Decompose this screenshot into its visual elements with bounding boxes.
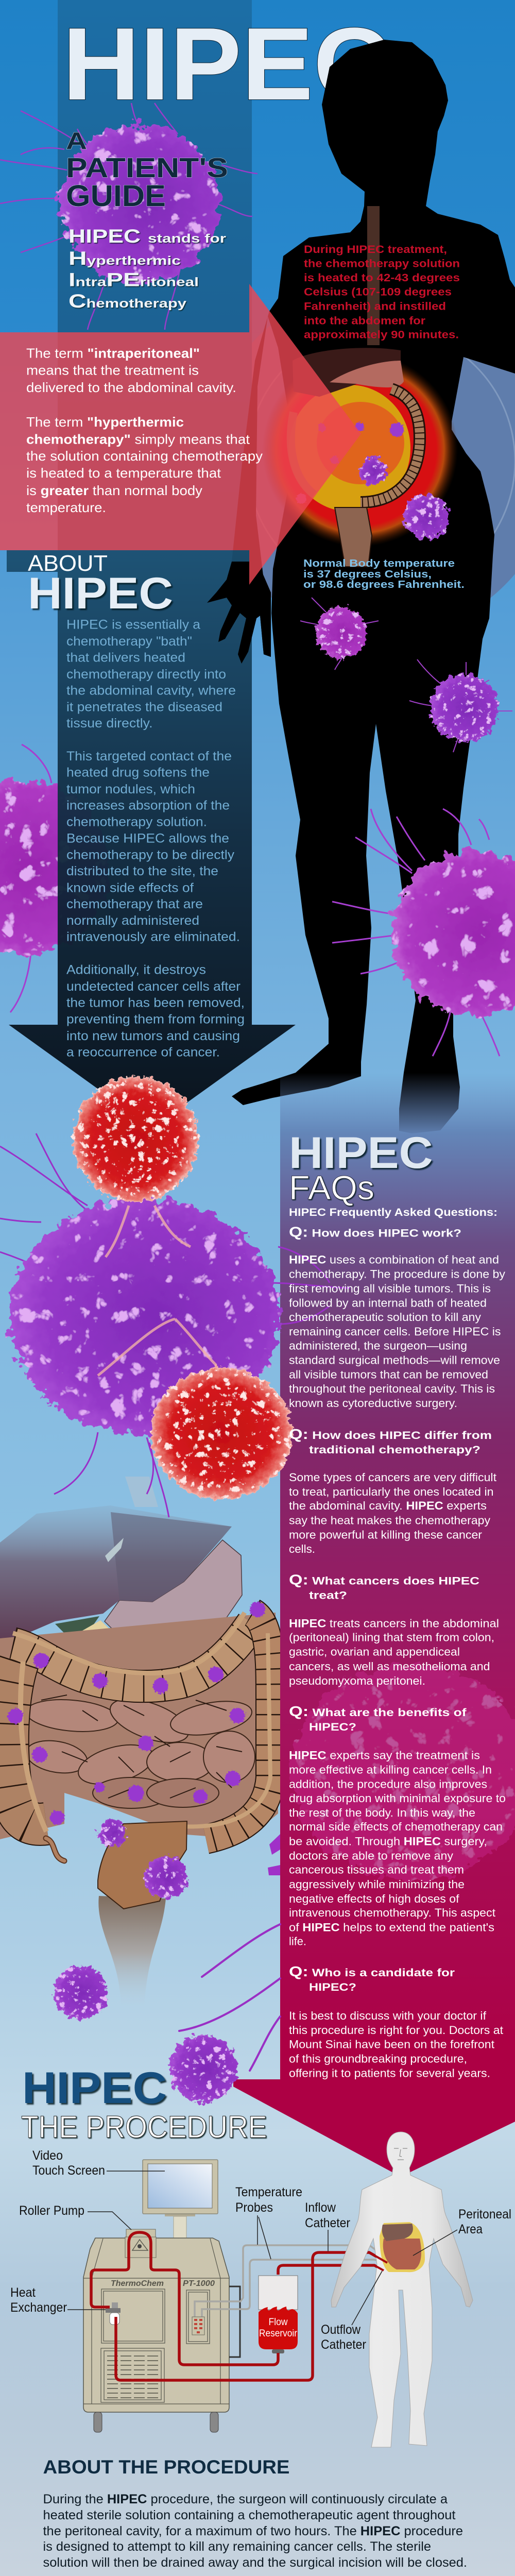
FAQ 1: how does HIPEC work: throughout the peritoneal cavity. This is	[289, 1382, 495, 1395]
text: heating fact: approximately 90 minutes.	[304, 329, 459, 341]
FAQ 4: benefits: be avoided. Through HIPEC surgery,	[289, 1835, 487, 1848]
blue-gray circle behind body	[206, 286, 515, 636]
FAQ 4: benefits: HIPEC experts say the treatment is	[289, 1749, 480, 1761]
rear bracket	[229, 2286, 240, 2357]
FAQ 1: how does HIPEC work: remaining cancer cells. Before HIPEC is	[289, 1325, 501, 1338]
text: heating fact: During HIPEC treatment,	[304, 243, 447, 256]
text: about HIPEC body: into new tumors and causing	[66, 1029, 240, 1043]
FAQ 4: benefits: intravenous chemotherapy. This aspect	[289, 1906, 496, 1919]
flow reservoir: Flow	[269, 2317, 288, 2328]
text: about the procedure body: solution will then be drained away and the surgical incision will be closed.	[43, 2555, 467, 2570]
diagram labels: Probes	[235, 2200, 273, 2215]
text: about HIPEC body: heated drug softens the	[66, 766, 210, 780]
FAQ 4: benefits: normal side effects of chemotherapy can	[289, 1820, 503, 1833]
monitor	[143, 2160, 218, 2238]
FAQ 1: how does HIPEC work: first removing all visible tumors. This is	[289, 1282, 491, 1295]
FAQ 1: how does HIPEC work: followed by an internal bath of heated	[289, 1297, 487, 1310]
FAQ 3: what cancers: pseudomyxoma peritonei.	[289, 1674, 425, 1687]
text: heating fact: is heated to 42-43 degrees	[304, 272, 460, 284]
face detail	[394, 2148, 407, 2160]
esophagus inside body	[367, 206, 380, 345]
text: acronym explanation: H yperthermic	[68, 248, 181, 269]
wheels	[94, 2412, 218, 2432]
roller pump	[125, 2229, 156, 2258]
heading: about HIPEC: ABOUT	[28, 551, 108, 576]
FAQ 5: candidate: of this groundbreaking procedure,	[289, 2053, 467, 2065]
icon: purple cancer cell behind guide title	[0, 103, 258, 330]
heading: HIPEC the procedure: THE PROCEDURE	[21, 2110, 267, 2144]
small bowel tint	[317, 402, 404, 484]
heat glow	[262, 353, 458, 547]
heading: a patient's guide: PATIENT'S	[66, 152, 228, 183]
small cells in abdomen	[296, 422, 404, 504]
heading: HIPEC FAQs: HIPEC	[289, 1128, 433, 1178]
sigmoid bulge	[98, 1821, 187, 1909]
FAQ 1: how does HIPEC work: all visible tumors that can be removed	[289, 1368, 488, 1381]
heat exchanger part	[106, 2302, 121, 2325]
FAQ 4: benefits: more effective at killing cancer cells. In	[289, 1763, 492, 1776]
text: about HIPEC body: normally administered	[66, 913, 199, 928]
FAQ 3: what cancers: Q: What cancers does HIPEC	[289, 1571, 479, 1588]
FAQ 2: how HIPEC differs: Some types of cancers are very difficult	[289, 1471, 497, 1484]
text: heating fact: Celsius (107-109 degrees	[304, 285, 452, 298]
diagram labels: Area	[458, 2222, 483, 2236]
FAQ 3: what cancers: cancers, as well as mesothelioma and	[289, 1660, 490, 1673]
heading: HIPEC FAQs: HIPEC Frequently Asked Questions:	[289, 1206, 497, 1218]
flow reservoir: Reservoir	[259, 2328, 298, 2339]
peritoneal organs	[380, 2222, 425, 2272]
text: about HIPEC body: increases absorption of the	[66, 798, 230, 812]
FAQ 4: benefits	[289, 1703, 506, 1948]
cabinet lines	[83, 2239, 229, 2404]
FAQ 1: how does HIPEC work: HIPEC uses a combination of heat and	[289, 1253, 499, 1266]
FAQ 1: how does HIPEC work: chemotherapeutic solution to kill any	[289, 1311, 482, 1324]
text: normal body temperature: or 98.6 degrees Fahrenheit.	[303, 579, 465, 590]
text: term definitions: The term "hyperthermic	[26, 414, 184, 430]
tendrils crossing FAQ panel edge	[179, 1834, 280, 2071]
FAQ 5: candidate: It is best to discuss with your doctor if	[289, 2009, 487, 2022]
text: acronym explanation: HIPEC	[68, 226, 141, 247]
text: term definitions: temperature.	[26, 500, 106, 515]
heading: about HIPEC: HIPEC	[28, 569, 173, 618]
text: term definitions: delivered to the abdominal cavity.	[26, 380, 236, 395]
silhouette hand over ribbon	[207, 562, 271, 664]
text: about HIPEC body: the tumor has been removed,	[66, 995, 245, 1010]
text: normal body temperature	[303, 558, 465, 590]
FAQ 4: benefits: HIPEC?	[309, 1721, 356, 1733]
FAQ 4: benefits: negative effects of high doses of	[289, 1892, 459, 1905]
text: heating fact: Fahrenheit) and instilled	[304, 300, 446, 312]
ascending colon	[180, 1613, 270, 1839]
descending colon and appendix	[8, 1662, 64, 1861]
text: about HIPEC body: intravenously are eliminated.	[66, 930, 240, 944]
diagram labels: Inflow	[305, 2200, 336, 2215]
text: acronym explanation: stands for	[148, 232, 226, 246]
text: heating fact: into the abdomen for	[304, 314, 426, 327]
heading: a patient's guide: A	[66, 127, 87, 154]
text: about the procedure body	[43, 2492, 467, 2576]
text: about the procedure body: is designed to attempt to kill any remaining cancer cells. The sterile	[43, 2539, 431, 2554]
abdominal organs with heat glow	[262, 348, 458, 567]
FAQ 4: benefits: addition, the procedure also improves	[289, 1777, 487, 1791]
gall bladder	[55, 1616, 99, 1636]
text: acronym explanation: Intra PE ritoneal	[68, 269, 199, 291]
esophagus stub	[125, 1477, 158, 1507]
FAQ 2: how HIPEC differs: more powerful at killing these cancer	[289, 1528, 483, 1541]
FAQ 2: how HIPEC differs: Q: How does HIPEC differ from	[289, 1426, 492, 1442]
text: acronym explanation: C hemotherapy	[68, 291, 187, 312]
FAQ 2: how HIPEC differs: say the heat makes the chemotherapy	[289, 1514, 491, 1527]
FAQ 4: benefits: of HIPEC helps to extend the patient's	[289, 1921, 494, 1934]
liver	[293, 348, 401, 397]
text: about HIPEC body: HIPEC is essentially a	[66, 618, 200, 632]
text: normal body temperature: Normal Body temperature	[303, 558, 455, 569]
text: term definitions: is greater than normal body	[26, 483, 202, 498]
text: about HIPEC body: preventing them from forming	[66, 1012, 245, 1027]
rectum	[335, 507, 372, 567]
text: about HIPEC body: Additionally, it destroys	[66, 963, 206, 977]
probe box	[192, 2317, 204, 2335]
FAQ 4: benefits: the rest of the body. In this way, the	[289, 1806, 475, 1819]
text: about HIPEC body: that delivers heated	[66, 650, 185, 665]
diagram labels: Touch Screen	[32, 2163, 105, 2178]
FAQ 1: how does HIPEC work: administered, the surgeon—using	[289, 1340, 467, 1352]
text: about HIPEC body: chemotherapy solution.	[66, 815, 207, 829]
FAQ 4: benefits: Q: What are the benefits of	[289, 1703, 467, 1719]
FAQ 5: candidate: this procedure is right for you. Doctors at	[289, 2024, 504, 2037]
FAQ 4: benefits: doctors are able to remove any	[289, 1849, 454, 1862]
heading: a patient's guide: GUIDE	[66, 179, 166, 213]
panel: header column	[58, 0, 252, 550]
transverse colon	[13, 1613, 252, 1686]
gray temperature probes	[195, 2245, 390, 2317]
silhouette: human body	[207, 40, 515, 1133]
heading: HIPEC the procedure	[21, 2063, 267, 2144]
FAQ 1: how does HIPEC work	[289, 1224, 506, 1410]
FAQ 2: how HIPEC differs: traditional chemotherapy?	[309, 1444, 480, 1456]
machine cabinet	[83, 2238, 229, 2412]
heading: about the procedure: ABOUT THE PROCEDURE	[43, 2456, 289, 2478]
text: about HIPEC body: the abdominal cavity, where	[66, 683, 236, 698]
diagram labels	[10, 2148, 511, 2352]
diagram labels: Temperature	[235, 2185, 302, 2199]
diagram labels: Peritoneal	[458, 2207, 511, 2222]
icon: purple cell above procedure heading	[169, 2035, 237, 2103]
diagram labels: Heat	[10, 2285, 36, 2300]
diagram labels: Video	[32, 2148, 63, 2163]
heading: HIPEC the procedure: HIPEC	[22, 2063, 167, 2113]
small intestine	[24, 1690, 255, 1808]
panel: FAQ column with arrow	[233, 1073, 515, 2177]
illustration: abdominal organs	[0, 1477, 278, 2009]
FAQ 5: candidate	[289, 1963, 504, 2080]
FAQ 3: what cancers: treat?	[309, 1589, 347, 1601]
FAQ 3: what cancers: (peritoneal) lining that stem from colon,	[289, 1631, 494, 1644]
text: term definitions	[26, 345, 263, 515]
text: about HIPEC body: chemotherapy directly into	[66, 667, 226, 682]
rectum fading tube	[98, 1896, 166, 2009]
panel: about ribbon arrow	[7, 550, 296, 1128]
flow reservoir	[259, 2276, 298, 2353]
text: about HIPEC body: tumor nodules, which	[66, 782, 195, 796]
liver	[0, 1505, 232, 1645]
text: about the procedure body: During the HIPEC procedure, the surgeon will continuously circulate a	[43, 2492, 448, 2506]
bowel crease lines	[41, 1695, 242, 1798]
text: about HIPEC body: This targeted contact of the	[66, 749, 232, 764]
red circuit tubing	[91, 2232, 387, 2380]
cell: lower right of abdomen	[404, 494, 449, 539]
heading: HIPEC FAQs: FAQs	[289, 1168, 374, 1207]
colon	[360, 389, 420, 502]
FAQ 5: candidate: Q: Who is a candidate for	[289, 1963, 455, 1979]
text: about HIPEC body: chemotherapy to be directly	[66, 848, 235, 862]
icon: small cells on lower organs	[54, 1819, 187, 2020]
heading: about HIPEC	[28, 551, 173, 618]
FAQ 1: how does HIPEC work: known as cytoreductive surgery.	[289, 1397, 457, 1410]
FAQ 1: how does HIPEC work: chemotherapy. The procedure is done by	[289, 1268, 506, 1281]
text: about HIPEC body: undetected cancer cells after	[66, 979, 241, 994]
catheters entering body	[369, 2252, 387, 2270]
text: heating fact	[304, 243, 460, 341]
text: about HIPEC body: distributed to the site, the	[66, 864, 218, 878]
heated solution	[289, 385, 410, 512]
FAQ 3: what cancers	[289, 1571, 499, 1687]
FAQ 2: how HIPEC differs: the abdominal cavity. HIPEC experts	[289, 1499, 487, 1512]
FAQ 4: benefits: cancerous tissues and treat them	[289, 1863, 464, 1876]
model name text: PT-1000	[183, 2279, 215, 2288]
text: term definitions: the solution containing chemotherapy	[26, 448, 263, 464]
text: about HIPEC body: known side effects of	[66, 880, 194, 895]
text: term definitions: means that the treatment is	[26, 363, 199, 378]
diagram labels: Exchanger	[10, 2300, 67, 2315]
text: about HIPEC body: it penetrates the diseased	[66, 700, 222, 715]
model name text: ThermoChem	[111, 2279, 164, 2288]
heading: a patient's guide	[66, 127, 228, 213]
FAQ 5: candidate: Mount Sinai have been on the forefront	[289, 2038, 495, 2051]
FAQ 1: how does HIPEC work: Q: How does HIPEC work?	[289, 1224, 461, 1240]
FAQ 1: how does HIPEC work: standard surgical methods—will remove	[289, 1354, 500, 1367]
icon: large cell behind left ribbon	[0, 744, 108, 1012]
text: heating fact: the chemotherapy solution	[304, 258, 460, 270]
diagram labels: Roller Pump	[19, 2204, 84, 2218]
heading: HIPEC main title: HIPEC	[62, 7, 391, 122]
label leader lines	[67, 2171, 457, 2325]
FAQ 4: benefits: drug absorption with minimal exposure to	[289, 1792, 506, 1805]
text: normal body temperature: is 37 degrees Celsius,	[303, 569, 432, 580]
text: about HIPEC body: Because HIPEC allows the	[66, 831, 229, 845]
diagram labels: Catheter	[321, 2337, 366, 2352]
text: acronym explanation	[68, 226, 226, 312]
FAQ 3: what cancers: HIPEC treats cancers in the abdominal	[289, 1617, 499, 1630]
text: about HIPEC body: chemotherapy that are	[66, 897, 203, 911]
text: term definitions: chemotherapy" simply means that	[26, 432, 250, 447]
diagram: HIPEC machine	[83, 2160, 390, 2432]
text: term definitions: The term "intraperitoneal"	[26, 345, 200, 361]
FAQ 5: candidate: offering it to patients for several years.	[289, 2067, 490, 2080]
text: about HIPEC body	[66, 618, 245, 1060]
faint magenta cell	[291, 1664, 515, 1880]
text: about the procedure body: heated sterile solution containing a chemotherapeutic agent throughout	[43, 2508, 456, 2522]
stomach	[330, 361, 404, 387]
text: term definitions: is heated to a temperature that	[26, 465, 221, 481]
text: about the procedure body: the peritoneal cavity, for a maximum of two hours. The HIPEC procedure	[43, 2524, 463, 2538]
FAQ 5: candidate: HIPEC?	[309, 1981, 356, 1993]
icon: giant purple cell	[0, 1133, 350, 1517]
FAQ 2: how HIPEC differs: to treat, particularly the ones located in	[289, 1485, 493, 1498]
FAQ 2: how HIPEC differs: cells.	[289, 1543, 315, 1555]
diagram: human figure	[331, 2132, 473, 2447]
vent louvers	[107, 2356, 160, 2398]
FAQ 3: what cancers: gastric, ovarian and appendiceal	[289, 1646, 460, 1658]
FAQ 4: benefits: aggressively while minimizing the	[289, 1878, 465, 1891]
FAQ 4: benefits: life.	[289, 1935, 306, 1948]
FAQ 2: how HIPEC differs	[289, 1426, 497, 1555]
text: about HIPEC body: tissue directly.	[66, 716, 152, 731]
heading: HIPEC FAQs	[289, 1128, 497, 1218]
icon: large cell on right leg	[332, 809, 515, 1056]
text: about HIPEC body: a reoccurrence of cancer.	[66, 1045, 220, 1060]
model name text	[111, 2279, 215, 2288]
diagram labels: Catheter	[305, 2216, 350, 2230]
stomach	[105, 1540, 242, 1645]
icon: cells on thigh	[300, 598, 512, 752]
diagram labels: Outflow	[321, 2323, 361, 2337]
backing mass of bowel	[0, 1613, 278, 1839]
text: about HIPEC body: chemotherapy "bath"	[66, 634, 192, 649]
icon: red cancer cells	[73, 1076, 293, 1499]
panel: red callout arrow	[0, 284, 361, 585]
pancreas	[82, 1620, 129, 1648]
tumor dots on organs	[8, 1602, 265, 1825]
